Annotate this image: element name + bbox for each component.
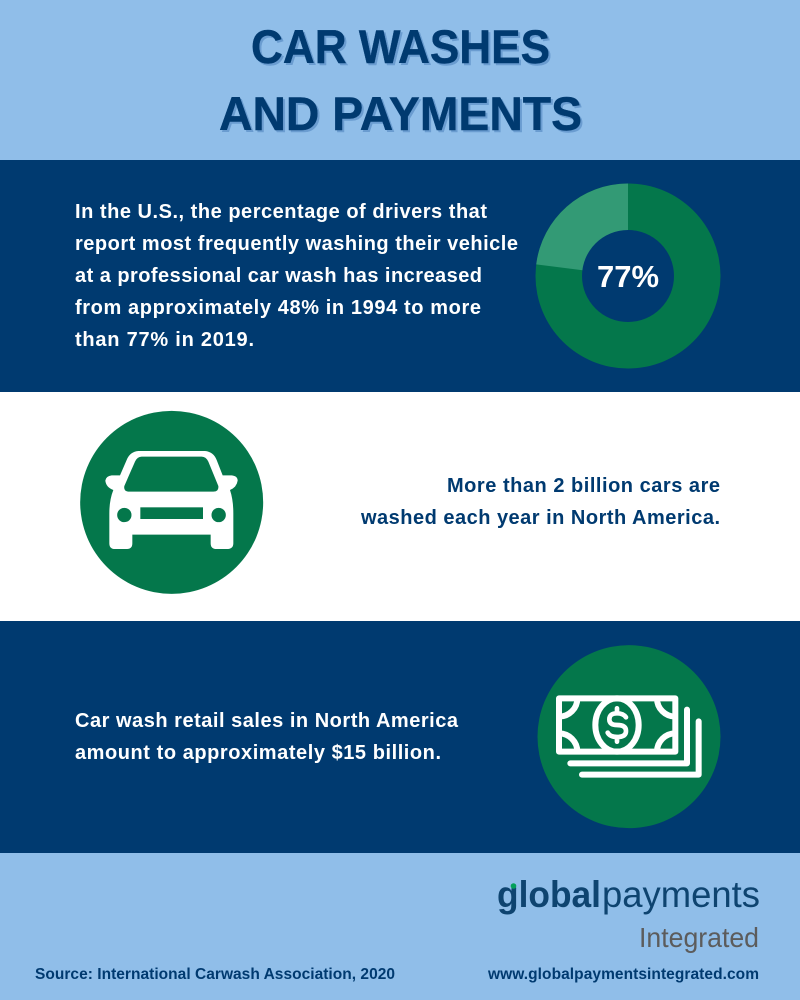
text: retail sales statement (75, 710, 459, 764)
header band (0, 0, 800, 160)
panel: cars washed (0, 392, 800, 621)
title: AND PAYMENTS (219, 87, 582, 140)
title (219, 20, 584, 142)
website url: www.globalpaymentsintegrated.com (487, 966, 759, 983)
text: driver percentage statement (75, 201, 518, 351)
logo: global payments integrated (497, 874, 760, 953)
panel: driver percentage (0, 160, 800, 392)
title: CAR WASHES (251, 20, 550, 73)
footer band (0, 853, 800, 1000)
title: CAR WASHES (253, 22, 552, 75)
text: driver percentage statement: than 77% in 2019. (75, 329, 254, 351)
title: AND PAYMENTS (221, 89, 584, 142)
text: driver percentage statement: In the U.S., the percentage of drivers that (75, 201, 487, 223)
text: retail sales statement: amount to approximately $15 billion. (75, 742, 441, 764)
logo: global payments integrated: Integrated (639, 922, 759, 953)
logo: global payments integrated: payments (602, 874, 760, 915)
logo: global payments integrated: global (497, 874, 601, 915)
text: driver percentage statement: report most frequently washing their vehicle (75, 233, 518, 255)
text: cars washed statement: More than 2 billion cars are (447, 475, 720, 497)
text: retail sales statement: Car wash retail sales in North America (75, 710, 459, 732)
text: cars washed statement: washed each year in North America. (360, 507, 720, 529)
icon: money (537, 645, 720, 828)
donut chart: 77%: 77% (597, 259, 659, 294)
text: driver percentage statement: at a professional car wash has increased (75, 265, 482, 287)
text: cars washed statement (360, 475, 720, 529)
donut chart: 77% (536, 183, 720, 368)
panel: retail sales (0, 621, 800, 853)
icon: car (80, 411, 263, 594)
text: driver percentage statement: from approximately 48% in 1994 to more (75, 297, 481, 319)
source note: Source: International Carwash Association, 2020 (35, 966, 395, 983)
